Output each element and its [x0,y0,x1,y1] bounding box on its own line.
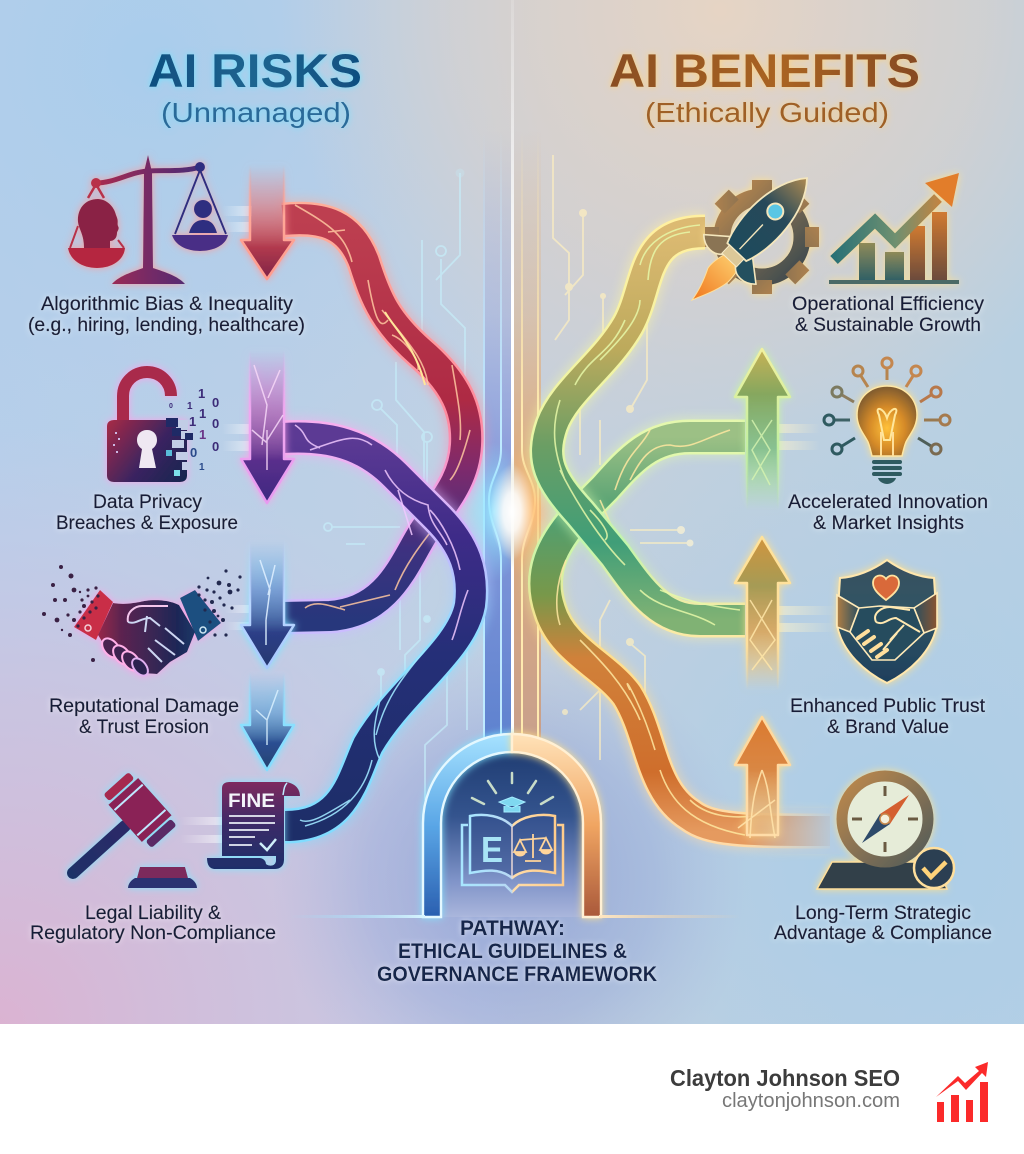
risk label: legal liability: Regulatory Non-Compliance [30,923,276,944]
risk label: algorithmic bias: Algorithmic Bias & Inequality [41,294,294,315]
arrow: benefit 3 up [735,537,790,690]
icon: rocket on gear [692,153,833,300]
icon: ethics book with scales [462,773,563,892]
brand name: Clayton Johnson SEO [670,1065,900,1091]
ribbon: gold-to-green benefit strand [547,225,745,625]
arrow: risk 3 down [241,540,294,668]
pathway label [377,917,657,986]
risk label: reputational damage [49,696,239,738]
benefit label: accelerated innovation [788,492,988,534]
risk label: legal liability: Legal Liability & [85,903,221,924]
logo icon: red rising chart [936,1062,988,1122]
risk label: data privacy: Data Privacy [93,492,203,513]
icon: broken padlock with binary digits: 0 [212,416,219,431]
pathway label: ETHICAL GUIDELINES & [398,940,627,963]
benefit label: operational efficiency [792,294,985,336]
icon: broken padlock with binary digits: 1 [199,462,205,473]
title: AI Risks: (Unmanaged) [161,97,351,128]
icon: trust shield with handshake [837,560,937,683]
feeder bands: icons to arrows, risks [180,206,252,843]
icon: broken padlock with binary digits: 1 [189,414,196,429]
icon: broken padlock with binary digits: 0 [212,395,219,410]
icon: broken padlock with binary digits: 1 [198,386,205,401]
benefit label: strategic advantage: Advantage & Compliance [774,923,992,944]
benefit label: operational efficiency: & Sustainable Growth [795,315,981,336]
risk label: reputational damage: Reputational Damage [49,696,239,717]
ribbon: red risk strand [283,205,470,617]
title: AI Risks: AI RISKS [148,44,362,97]
icon: compass with check badge [817,776,954,889]
benefit label: accelerated innovation: & Market Insights [813,513,964,534]
circuit traces: risks side [324,170,467,800]
icon: ethics book with scales: E [481,829,503,870]
icon: broken padlock with binary digits: 1 [199,427,206,442]
icon: broken padlock with binary digits [107,372,219,482]
risk label: data privacy: Breaches & Exposure [56,513,238,534]
arrow: benefit 2 up [735,349,790,510]
risk label: legal liability [30,903,276,944]
circuit traces: benefits side [553,155,694,760]
benefit label: strategic advantage [774,903,992,944]
icon: disintegrating handshake [42,565,242,679]
title: AI Benefits [609,44,920,128]
icon: broken padlock with binary digits: 0 [190,445,197,460]
fade of lower ribbon toward compass [745,808,840,854]
icon: broken padlock with binary digits: 1 [199,406,206,421]
risk label: algorithmic bias [28,294,305,336]
benefit label: strategic advantage: Long-Term Strategic [795,903,971,924]
ribbon: purple-to-blue risk strand [283,425,471,826]
icon: broken padlock with binary digits: 0 [212,439,219,454]
particles, left [42,565,100,662]
footer band [0,1024,1024,1154]
label: FINE stamp: FINE [228,791,275,812]
label: FINE stamp [228,791,276,850]
arrow: risk 4 down [241,672,294,770]
arrow: benefit 4 up [735,717,790,838]
title: AI Benefits: (Ethically Guided) [645,97,889,128]
feeder bands: icons to arrows, benefits [778,424,836,632]
icon: fine document [207,782,300,869]
icon: biased scales [68,155,228,284]
arrow: risk 1 down [241,165,294,279]
pathway label: PATHWAY: [460,917,565,940]
ribbon: green-to-orange benefit strand [545,430,830,835]
icon: broken padlock with binary digits: 0 [169,403,173,410]
title: AI Risks [148,44,362,128]
benefit label: accelerated innovation: Accelerated Innovation [788,492,988,513]
risk label: reputational damage: & Trust Erosion [79,717,209,738]
brand name: claytonjohnson.com [722,1090,900,1112]
risk label: data privacy [56,492,238,534]
benefit label: public trust: & Brand Value [827,717,949,738]
icon: broken padlock with binary digits: 1 [187,401,193,412]
brand name [670,1065,900,1112]
pathway arch [290,734,740,918]
icon: light bulb with nodes [824,358,950,484]
benefit label: operational efficiency: Operational Efficiency [792,294,985,315]
pathway label: GOVERNANCE FRAMEWORK [377,963,657,986]
icon: growth chart [829,173,959,284]
benefit label: public trust [790,696,986,738]
icon: gavel [73,770,197,888]
risk label: algorithmic bias: (e.g., hiring, lending, healthcare) [28,315,305,336]
particles, right [197,569,242,637]
arrow: risk 2 down [241,350,294,503]
title: AI Benefits: AI BENEFITS [609,44,920,97]
benefit label: public trust: Enhanced Public Trust [790,696,986,717]
central divider: blue and orange light column [462,0,562,740]
